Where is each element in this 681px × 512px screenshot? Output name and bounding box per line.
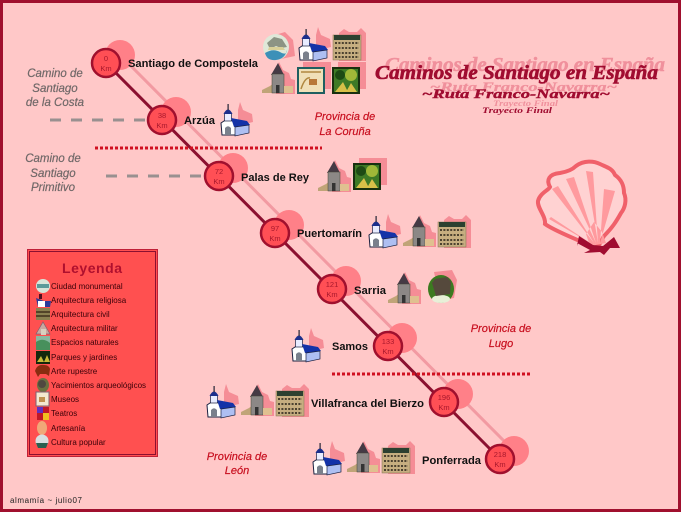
stop: Arzúa xyxy=(148,97,253,136)
legend entries: Arquitectura religiosa xyxy=(51,296,127,305)
stop: Villafranca del Bierzo: 196 xyxy=(438,393,450,402)
label: Camino de Santiago de la Costa: Camino de xyxy=(27,68,83,80)
stop: Samos: 133 xyxy=(382,337,394,346)
dashed branch: Camino Primitivo xyxy=(106,174,204,178)
label: Camino de Santiago Primitivo: Camino de xyxy=(25,153,81,165)
stop: Palas de Rey xyxy=(205,153,387,192)
legend entries: Arte rupestre xyxy=(51,367,98,376)
stop: Palas de Rey: 72 xyxy=(215,167,223,176)
legend entries: Cultura popular xyxy=(51,438,106,447)
label: Provincia de León: Provincia de xyxy=(207,451,267,463)
legend entries: Yacimientos arqueológicos xyxy=(51,381,146,390)
stop: Ponferrada: 218 xyxy=(494,450,506,459)
stop: Sarria: Sarria xyxy=(354,285,387,297)
legend entries: Teatros xyxy=(51,409,77,418)
label: Provincia de Lugo: Provincia de xyxy=(471,323,531,335)
legend entries: Espacios naturales xyxy=(51,338,119,347)
label: Provincia de León: León xyxy=(225,465,249,477)
title block: Trayecto Final xyxy=(493,99,559,108)
label: Provincia de La Coruña: Provincia de xyxy=(315,111,375,123)
stop: Sarria: 121 xyxy=(326,280,338,289)
legend entries: Ciudad monumental xyxy=(51,282,123,291)
panel: legend xyxy=(28,250,158,456)
label: Camino de Santiago de la Costa: Santiago xyxy=(32,83,78,95)
stop: Samos: Km xyxy=(382,347,394,356)
legend entries xyxy=(35,279,146,448)
icon: scallop shell xyxy=(538,162,625,255)
title block: ~Ruta Franco-Navarra~ xyxy=(422,86,611,101)
title block: Trayecto Final xyxy=(482,106,553,115)
stop: Santiago de Compostela: Km xyxy=(100,64,112,73)
label: Camino de Santiago de la Costa xyxy=(26,68,84,109)
stop: Arzúa: 38 xyxy=(158,111,166,120)
stop: Villafranca del Bierzo: Villafranca del Bierzo xyxy=(311,398,424,410)
title block: Caminos de Santiago en España xyxy=(375,62,658,84)
dashed branch: Camino de la Costa xyxy=(50,118,148,122)
stop: Samos xyxy=(292,323,417,362)
label: Provincia de Lugo: Lugo xyxy=(489,338,513,350)
stop: Puertomarín: 97 xyxy=(271,224,279,233)
title block: Caminos de Santiago en España xyxy=(385,54,665,76)
stop: Santiago de Compostela: Santiago de Compostela xyxy=(128,58,259,70)
label: Camino de Santiago de la Costa: de la Costa xyxy=(26,97,84,109)
label: Camino de Santiago Primitivo: Primitivo xyxy=(31,182,76,194)
legend entries: Artesanía xyxy=(51,424,86,433)
stop: Samos: Samos xyxy=(332,341,368,353)
legend entries: Museos xyxy=(51,395,79,404)
label: Camino de Santiago Primitivo xyxy=(25,153,81,194)
label: Provincia de León xyxy=(207,451,267,477)
stop: Villafranca del Bierzo xyxy=(207,379,473,418)
stop: Ponferrada xyxy=(313,436,529,475)
stop: Puertomarín: Km xyxy=(269,234,281,243)
stop: Sarria: Km xyxy=(326,290,338,299)
label: Provincia de La Coruña: La Coruña xyxy=(319,126,371,138)
stop: Arzúa: Km xyxy=(156,121,168,130)
province divider: Coruña / Lugo xyxy=(95,146,322,150)
stop: Santiago de Compostela: 0 xyxy=(104,54,108,63)
label: Provincia de Lugo xyxy=(471,323,531,350)
stop: Sarria xyxy=(318,266,457,304)
legend entries: Arquitectura civil xyxy=(51,310,110,319)
legend entries: Arquitectura militar xyxy=(51,324,118,333)
stop: Palas de Rey: Palas de Rey xyxy=(241,172,310,184)
stop: Ponferrada: Ponferrada xyxy=(422,455,482,467)
stop: Puertomarín xyxy=(261,210,471,248)
legend entries: Parques y jardines xyxy=(51,353,117,362)
credit: almamía ~ julio07 xyxy=(10,496,83,505)
legend heading: Leyenda xyxy=(62,260,122,276)
label: Provincia de La Coruña xyxy=(315,111,375,138)
stop: Puertomarín: Puertomarín xyxy=(297,228,362,240)
stop: Ponferrada: Km xyxy=(494,460,506,469)
route lines xyxy=(106,55,514,459)
stop: Villafranca del Bierzo: Km xyxy=(438,403,450,412)
title block xyxy=(375,54,665,115)
label: Camino de Santiago Primitivo: Santiago xyxy=(30,168,76,180)
title block: ~Ruta Franco-Navarra~ xyxy=(430,79,618,94)
stop: Arzúa: Arzúa xyxy=(184,115,216,127)
stop: Santiago de Compostela xyxy=(92,27,366,94)
province divider: Lugo / León xyxy=(332,372,531,376)
stop: Palas de Rey: Km xyxy=(213,177,225,186)
